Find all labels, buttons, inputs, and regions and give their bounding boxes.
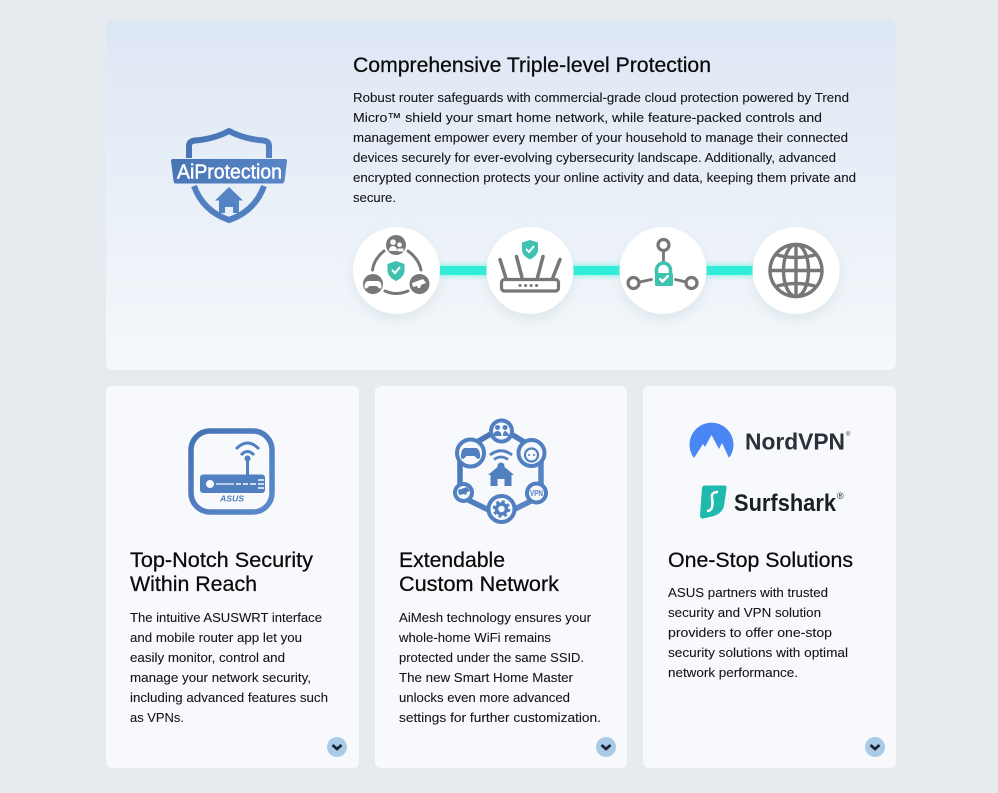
logo: Surfshark: Surfshark (734, 490, 836, 517)
text block: settings for further customization. (399, 710, 601, 725)
icon: router: ASUS (219, 494, 245, 504)
panel: custom network (375, 386, 627, 768)
heading: Extendable (399, 549, 505, 572)
text block: description: Robust router safeguards with commercial-grade cloud protection powered by Trend (353, 90, 849, 105)
text block: providers to offer one-stop (668, 625, 832, 640)
icon: AiProtection shield: AiProtection (177, 162, 282, 184)
text block: including advanced features such (130, 690, 328, 705)
panel: triple-level protection (106, 20, 896, 370)
icon: mesh network: VPN (530, 489, 543, 498)
text block: description: secure. (353, 190, 396, 205)
heading (399, 549, 560, 596)
icon: globe (752, 227, 840, 314)
expand button (596, 737, 616, 757)
logo: NordVPN (690, 423, 851, 458)
expand button (865, 737, 885, 757)
text block: as VPNs. (130, 710, 184, 725)
logo: NordVPN: NordVPN (745, 428, 845, 454)
icon: router (191, 431, 272, 512)
heading: Custom Network (399, 573, 560, 596)
icon: mesh network (455, 420, 546, 522)
icon: encrypted connection lock (620, 227, 706, 314)
text block: description (353, 90, 856, 205)
text block (668, 585, 848, 680)
icon: connected devices (353, 227, 440, 314)
text block: easily monitor, control and (130, 650, 285, 665)
heading (130, 549, 314, 596)
text block: whole-home WiFi remains (398, 630, 551, 645)
icon: AiProtection shield (171, 131, 287, 220)
text block: description: Micro™ shield your smart home network, while feature-packed controls and (353, 110, 822, 125)
icon: router with shield (486, 227, 574, 314)
text block: AiMesh technology ensures your (399, 610, 592, 625)
text block: unlocks even more advanced (399, 690, 570, 705)
heading: One-Stop Solutions (668, 549, 853, 572)
text block: The new Smart Home Master (399, 670, 574, 685)
heading: Top-Notch Security (130, 549, 314, 572)
text block (130, 610, 328, 725)
text block: network performance. (668, 665, 798, 680)
text block: description: management empower every member of your household to manage their connected (353, 130, 848, 145)
text block: protected under the same SSID. (399, 650, 584, 665)
logo: Surfshark: ® (837, 491, 844, 501)
logo: NordVPN: ® (846, 431, 851, 438)
text block: The intuitive ASUSWRT interface (130, 610, 322, 625)
connector line (430, 264, 770, 277)
panel: top-notch security (106, 386, 359, 768)
logo: Surfshark (700, 486, 844, 518)
expand button (327, 737, 347, 757)
text block: description: encrypted connection protects your online activity and data, keeping them private and (353, 170, 856, 185)
text block: security and VPN solution (668, 605, 821, 620)
heading: Within Reach (130, 573, 257, 596)
text block: ASUS partners with trusted (668, 585, 828, 600)
title: Comprehensive Triple-level Protection (353, 54, 711, 77)
panel: one-stop solutions (643, 386, 896, 768)
text block (398, 610, 601, 725)
text block: description: devices securely for ever-evolving cybersecurity landscape. Additionally, advanced (353, 150, 836, 165)
text block: and mobile router app let you (130, 630, 302, 645)
text block: security solutions with optimal (668, 645, 848, 660)
text block: manage your network security, (130, 670, 311, 685)
